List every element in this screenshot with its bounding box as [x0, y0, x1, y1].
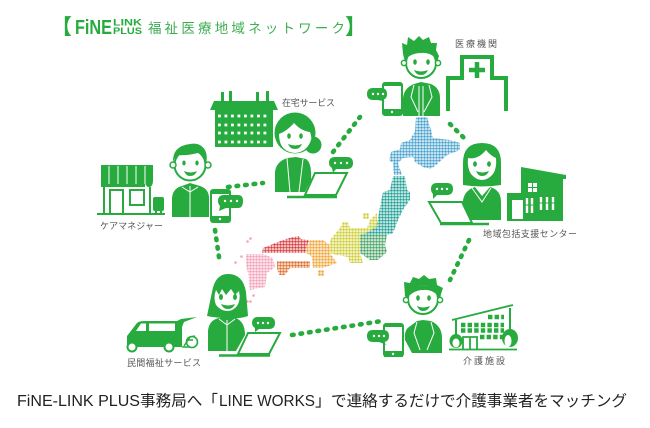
label: care manager: ケアマネジャー	[100, 221, 163, 231]
Shikoku	[277, 261, 310, 275]
label: care facility: 介護施設	[463, 355, 505, 366]
Tohoku	[360, 176, 410, 235]
Chubu	[330, 213, 377, 263]
label: private welfare services: 民間福祉サービス	[127, 357, 201, 368]
title: LINK	[113, 18, 142, 28]
hospital icon	[448, 57, 506, 111]
Kyushu	[234, 237, 275, 303]
community center house icon	[507, 167, 566, 221]
care facility building icon	[449, 305, 518, 350]
Kanto	[360, 235, 387, 260]
dotted connector lines	[215, 117, 469, 335]
title: FiNE	[75, 17, 112, 39]
person: private welfare services with laptop	[207, 274, 280, 356]
caption	[17, 392, 627, 410]
title: 福祉医療地域ネットワーク	[148, 21, 345, 36]
person: community support center with laptop	[429, 143, 501, 224]
caption: LINE WORKS	[219, 393, 315, 410]
Kinki	[305, 240, 337, 276]
label: community support center: 地域包括支援センター	[483, 228, 577, 239]
title: PLUS	[113, 26, 142, 37]
person: medical institution with phone	[367, 36, 441, 116]
dotted map of Japan	[234, 117, 460, 303]
title: 【	[51, 16, 72, 39]
person: care facility with phone	[367, 275, 443, 357]
store icon	[97, 165, 165, 215]
caption: 」	[315, 393, 331, 410]
title	[51, 16, 366, 39]
title: 】	[345, 16, 366, 39]
label: medical institution: 医療機関	[455, 38, 497, 49]
wheelchair van icon	[127, 317, 198, 352]
caption: 事務局へ「	[140, 392, 218, 410]
label: home services: 在宅サービス	[282, 97, 335, 108]
caption: FiNE-LINK PLUS	[17, 393, 140, 410]
Chugoku	[262, 236, 309, 253]
home care building icon	[210, 91, 278, 147]
person: care manager with phone	[170, 144, 243, 222]
person: home services with laptop	[274, 112, 353, 197]
Hokkaido	[389, 117, 460, 175]
caption: で連絡するだけで介護事業者をマッチング	[331, 392, 627, 410]
